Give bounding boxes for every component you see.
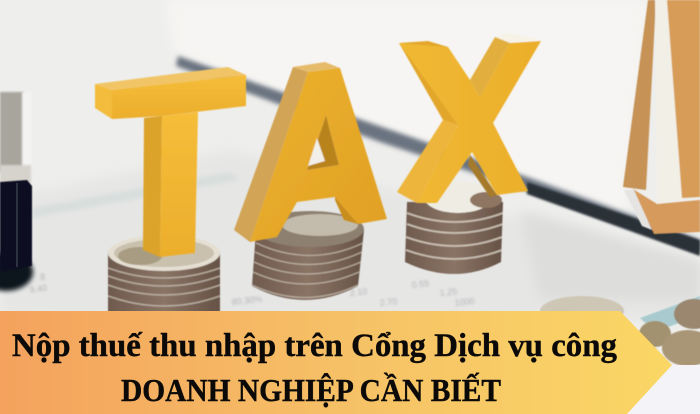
letter T <box>95 67 246 257</box>
table paper with printed figures <box>0 150 700 320</box>
blurred table figures: 80.30% <box>231 294 263 307</box>
coin stack under X <box>405 181 503 274</box>
blurred table figures <box>29 272 475 308</box>
coin stack under T <box>108 235 220 312</box>
heading line 1: Nộp thuế thu nhập trên Cổng Dịch vụ công <box>12 328 617 364</box>
blurred table figures: 9.40 <box>29 283 48 295</box>
banner arrow <box>0 311 672 414</box>
blurred table figures: 2.10 <box>349 286 368 298</box>
blurred table figures: 1000 <box>454 296 475 308</box>
letter A <box>234 62 387 242</box>
white corner below arrow <box>627 365 700 414</box>
blurred table figures: 1.25 <box>439 286 458 298</box>
blurred table figures: 8 <box>40 272 45 282</box>
dark object at left edge <box>0 92 33 291</box>
blurred table figures: 2.70 <box>379 296 398 308</box>
loose coins at bottom right <box>540 296 700 366</box>
light blue strip <box>640 296 700 332</box>
letter X <box>397 33 541 203</box>
coin stack under A <box>252 211 364 300</box>
heading line 2: DOANH NGHIỆP CẦN BIẾT <box>121 372 501 408</box>
book at right <box>623 0 700 234</box>
white sheet of paper behind the letters <box>165 0 650 215</box>
blurred table figures: 0.55 <box>411 278 430 290</box>
dark binder edge <box>176 56 700 252</box>
